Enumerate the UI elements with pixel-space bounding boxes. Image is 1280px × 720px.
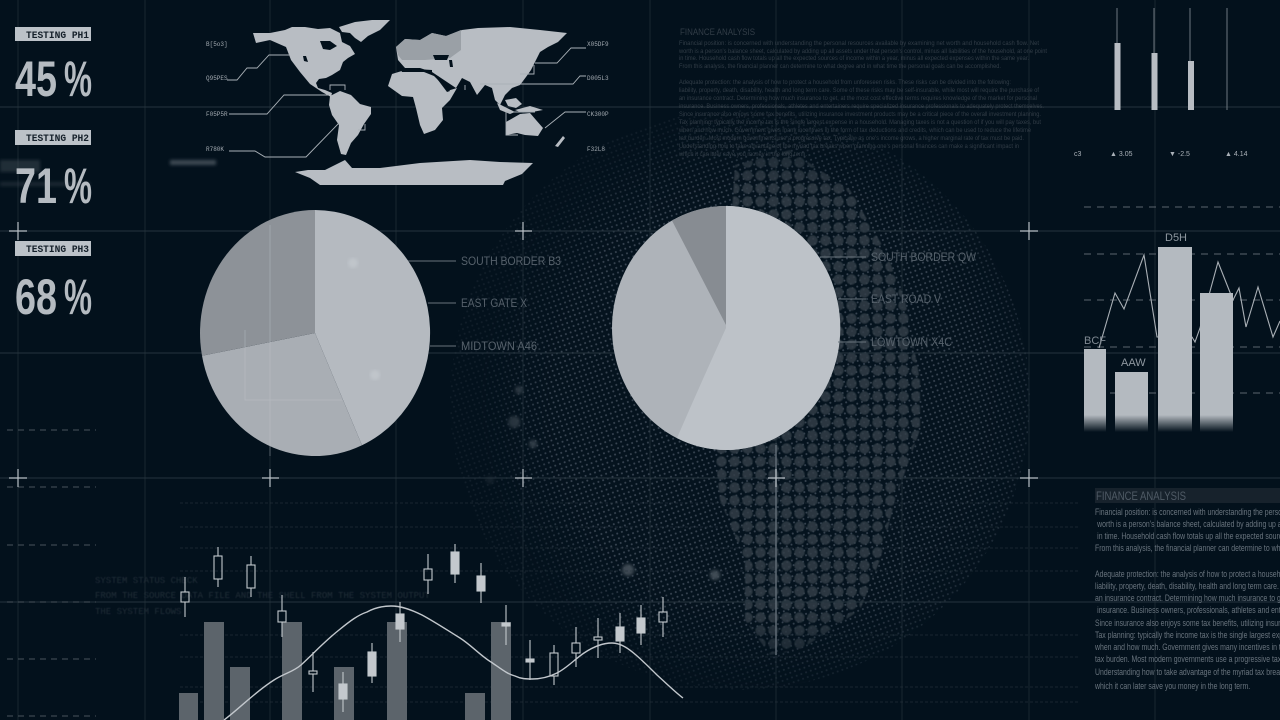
world map (206, 20, 609, 185)
faint terminal text (95, 576, 430, 617)
text block: top finance analysis: an insurance contract. Determining how much insurance to get, at the most cost effective terms requires knowledge of the market for personal (679, 96, 1037, 102)
text block: top finance analysis: FINANCE ANALYSIS (680, 27, 755, 37)
value: 71%: % (64, 158, 92, 214)
map callout labels: Q95PES (206, 75, 228, 82)
map callout leader lines (227, 48, 586, 157)
map callout labels: R780K (206, 146, 224, 153)
map callout labels: B[5o3] (206, 41, 228, 48)
ticker readouts (1074, 151, 1248, 158)
pie labels: right (820, 250, 977, 349)
text block: top finance analysis: From this analysis, the financial planner can determine to what degree and in what time the personal goals can be accomplished. (679, 64, 1001, 70)
bar: AAW (1115, 357, 1148, 432)
pie labels: right: SOUTH BORDER QW (871, 250, 977, 264)
text block: top finance analysis: Since insurance also enjoys some tax benefits, utilizing insurance investment products may be a critical piece of the overall investment planning. (679, 112, 1041, 118)
text block: bottom right finance analysis: which it can later save you money in the long term. (1094, 680, 1250, 691)
bar: D5H (1158, 232, 1192, 432)
pie labels: right: EAST ROAD V (871, 292, 941, 306)
map callout labels (206, 41, 609, 153)
faint terminal text: FROM THE SOURCE DATA FILE AND THE SHELL FROM THE SYSTEM OUTPUT (95, 591, 430, 601)
ticker readouts: ▲ 4.14 (1225, 151, 1248, 158)
text block: top finance analysis: in time. Household cash flow totals up all the expected sources of income within a year, minus all expected expenses within the same year. (679, 56, 1029, 62)
tag: testing ph2: TESTING PH2 (26, 134, 89, 145)
panel: testing phase 1 (15, 27, 92, 107)
ticker readouts: c3 (1074, 151, 1082, 158)
bar: AAW: AAW (1121, 357, 1146, 369)
text block: top finance analysis: when and how much. Government gives many incentives in the form of tax deductions and credits, which can be used to reduce the lifetime (678, 128, 1032, 134)
ticker readouts: ▼ -2.5 (1169, 151, 1190, 158)
map callout labels: D005L3 (587, 75, 609, 82)
text block: top finance analysis: liability, property, death, disability, health and long term care. Some of these risks may be self-insurable, while most will require the purchase of (679, 88, 1039, 94)
pie labels: left: EAST GATE X (461, 296, 527, 310)
dotted globe (450, 110, 1030, 696)
map callout labels: F32L8 (587, 146, 605, 153)
trend line (1099, 255, 1280, 348)
text block: top finance analysis: Understanding how to take advantage of the myriad tax breaks when planning one's personal finances can make a significant impact in (679, 144, 1019, 150)
bottom trend curve (224, 606, 683, 720)
tag: testing ph3: TESTING PH3 (26, 245, 89, 256)
filled candles (339, 544, 645, 712)
continents (253, 20, 567, 185)
text block: top finance analysis: Adequate protection: the analysis of how to protect a household from unforeseen risks. These risks can be divided into the following: (679, 80, 1011, 86)
text block: top finance analysis (678, 27, 1047, 158)
bottom candlesticks (181, 544, 667, 712)
value: 71%: 71 (15, 158, 57, 214)
panel: testing phase 3 (15, 241, 92, 325)
faint terminal text: THE SYSTEM FLOWS (95, 607, 181, 617)
text block: bottom right finance analysis (1094, 488, 1280, 691)
pie labels: right: LOWTOWN X4C (871, 335, 952, 349)
panel: testing phase 2 (15, 130, 92, 214)
text block: bottom right finance analysis: FINANCE ANALYSIS (1096, 489, 1186, 503)
map callout labels: CK300P (587, 111, 609, 118)
bar: fourth (1200, 293, 1233, 432)
bar: D5H: D5H (1165, 232, 1187, 244)
pie chart: right (612, 206, 840, 450)
bar and line chart: right (1084, 207, 1280, 432)
left dashed ticks (7, 430, 96, 716)
dashed gridlines (1084, 207, 1280, 393)
tag: testing ph1: TESTING PH1 (26, 31, 89, 42)
ticker readouts: ▲ 3.05 (1110, 151, 1133, 158)
text block: top finance analysis: which it can later save you money in the long term. (678, 152, 807, 158)
pie labels: left: MIDTOWN A46 (461, 339, 537, 353)
pie chart: left (200, 210, 430, 456)
candlestick chart: top right (1114, 8, 1227, 110)
text block: top finance analysis: insurance. Business owners, professionals, athletes and entertainers require specialized insurance professionals to adequately protect themselves. (679, 104, 1044, 110)
map callout labels: X05DF9 (587, 41, 609, 48)
text block: top finance analysis: Financial position: is concerned with understanding the personal resources available by examining net worth and household cash flow. Net (679, 41, 1039, 47)
value: 45%: % (64, 51, 92, 107)
blurred background text smears (0, 160, 216, 186)
text block: top finance analysis: Tax planning: typically the income tax is the single largest expense in a household. Managing taxes is not a question of if you will pay taxes, but (679, 120, 1041, 126)
text block: top finance analysis: tax burden. Most modern governments use a progressive tax. Typically, as one's income grows, a higher marginal rate of tax must be paid. (679, 136, 1024, 142)
bar: BCF: BCF (1084, 335, 1106, 347)
russia highlight (396, 30, 461, 60)
map dark lakes and seas (303, 41, 453, 92)
value: 68%: % (64, 269, 92, 325)
faint terminal text: SYSTEM STATUS CHECK (95, 576, 198, 586)
bar: BCF (1084, 335, 1106, 432)
map callout labels: F05P5R (206, 111, 228, 118)
text block: top finance analysis: worth is a person's balance sheet, calculated by adding up all assets under that person's control, minus all liabilities of the household, at one point (678, 49, 1047, 55)
hollow candles (181, 547, 667, 692)
bottom bar chart (179, 622, 511, 720)
crosshair markers (9, 222, 1038, 487)
pie labels: left (408, 254, 561, 353)
value: 68%: 68 (15, 269, 57, 325)
pie labels: left: SOUTH BORDER B3 (461, 254, 561, 268)
value: 45%: 45 (15, 51, 57, 107)
